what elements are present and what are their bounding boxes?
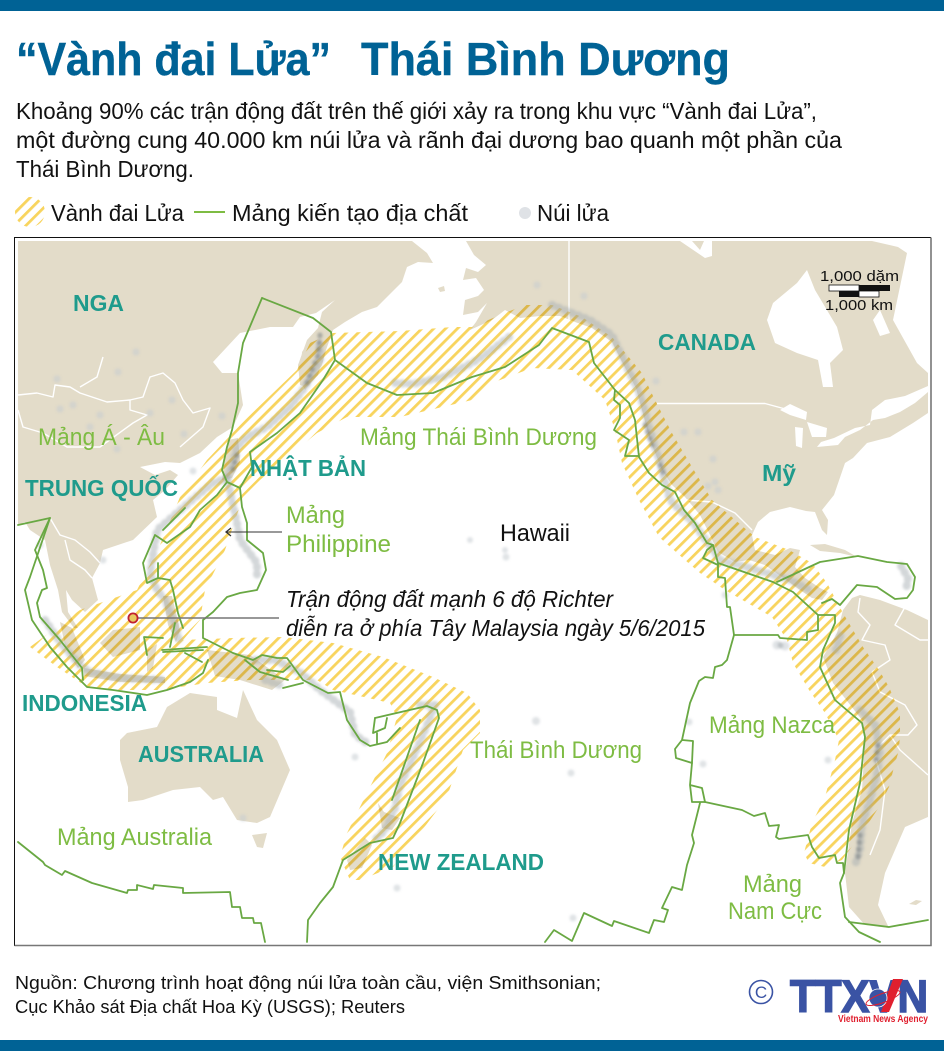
- country labels: AUSTRALIA: [138, 741, 264, 767]
- Hawaii label: Hawaii: [500, 520, 570, 547]
- country borders: [18, 241, 928, 855]
- legend: volcano label: Núi lửa: [537, 200, 609, 226]
- copyright icon: [750, 980, 772, 1004]
- bottom bar: [0, 1040, 944, 1051]
- earthquake callout: [286, 586, 705, 641]
- land: Japan: [222, 438, 240, 480]
- source text: Cục Khảo sát Địa chất Hoa Kỳ (USGS); Reuters: [15, 997, 405, 1017]
- plate labels: Mảng: [286, 502, 345, 529]
- intro text: một đường cung 40.000 km núi lửa và rãnh đại dương bao quanh một phần của: [16, 127, 842, 153]
- plate labels: Mảng: [743, 871, 802, 898]
- scale bar: [820, 268, 899, 314]
- lakes and gulf: [780, 386, 928, 448]
- land: New Guinea: [207, 650, 285, 690]
- earthquake callout: diễn ra ở phía Tây Malaysia ngày 5/6/2015: [286, 614, 705, 641]
- land: Java and Lesser Sunda: [84, 668, 165, 683]
- land: New Zealand south: [347, 838, 372, 870]
- land: Alaska island: [438, 286, 445, 292]
- plate labels: Nam Cực: [728, 898, 822, 925]
- title: [16, 33, 730, 85]
- logo tagline: Vietnam News Agency: [838, 1014, 928, 1025]
- land: Tasmania: [252, 833, 267, 848]
- plate labels: Mảng Á - Âu: [38, 424, 165, 451]
- logo TTXVN: TTXVN: [790, 971, 928, 1022]
- land: Cuba: [810, 544, 857, 557]
- tectonic plate lines: [18, 298, 928, 942]
- plate labels: Philippine: [286, 531, 391, 558]
- country labels: NHẬT BẢN: [250, 453, 366, 481]
- earthquake callout: Trận động đất mạnh 6 độ Richter: [286, 586, 614, 612]
- scattered volcano dots: [36, 282, 832, 922]
- legend: volcano dot: [519, 207, 531, 219]
- country labels: [22, 290, 796, 875]
- land: Sulawesi: [147, 644, 157, 672]
- country labels: TRUNG QUỐC: [25, 474, 178, 501]
- intro text: [16, 98, 842, 182]
- map panel: [14, 238, 931, 946]
- title: “Vành đai Lửa”: [16, 33, 331, 85]
- legend: ring of fire swatch: [15, 197, 45, 227]
- country labels: INDONESIA: [22, 690, 147, 716]
- plate labels: Mảng Nazca: [709, 712, 836, 739]
- plate labels: Mảng Thái Bình Dương: [360, 424, 597, 451]
- plate labels: [38, 424, 836, 925]
- land: Borneo: [100, 627, 140, 657]
- land: Philippines: [163, 596, 180, 642]
- legend: plate label: Mảng kiến tạo địa chất: [232, 200, 469, 226]
- top bar: [0, 0, 944, 11]
- source text: Nguồn: Chương trình hoạt động núi lửa toàn cầu, viện Smithsonian;: [15, 973, 601, 993]
- land: New Zealand north: [378, 803, 400, 830]
- title: Thái Bình Dương: [361, 33, 730, 85]
- intro text: Khoảng 90% các trận động đất trên thế giới xảy ra trong khu vực “Vành đai Lửa”,: [16, 98, 817, 124]
- land: Sumatra: [60, 622, 85, 668]
- logo: red V stroke: [881, 979, 903, 1012]
- country labels: NGA: [73, 290, 124, 316]
- intro text: Thái Bình Dương.: [16, 156, 194, 182]
- legend: [15, 197, 609, 227]
- plate labels: Thái Bình Dương: [470, 737, 642, 764]
- land: Asia: [18, 241, 433, 628]
- scale label miles: 1,000 dặm: [820, 268, 899, 285]
- land: Falklands: [909, 900, 922, 905]
- country labels: NEW ZEALAND: [378, 849, 544, 875]
- land: Kamchatka tint: [300, 330, 326, 390]
- land masses: [18, 241, 928, 928]
- legend: ring of fire label: Vành đai Lửa: [51, 200, 184, 226]
- logo: globe: [869, 989, 887, 1007]
- scale label km: 1,000 km: [825, 297, 893, 314]
- country labels: CANADA: [658, 329, 756, 355]
- country labels: Mỹ: [762, 460, 796, 486]
- arrow to Philippine plate: [226, 528, 282, 536]
- copyright icon: C: [755, 983, 767, 1002]
- land: North America: [463, 241, 928, 600]
- earthquake marker: [128, 613, 279, 623]
- legend: plate line: [194, 211, 225, 213]
- volcano chains: [45, 305, 908, 865]
- land: Australia: [120, 690, 290, 823]
- map frame: [14, 238, 931, 946]
- land: South America: [823, 595, 928, 928]
- ring of fire belt: [30, 305, 900, 880]
- source text: [15, 973, 601, 1017]
- plate labels: Mảng Australia: [57, 824, 213, 851]
